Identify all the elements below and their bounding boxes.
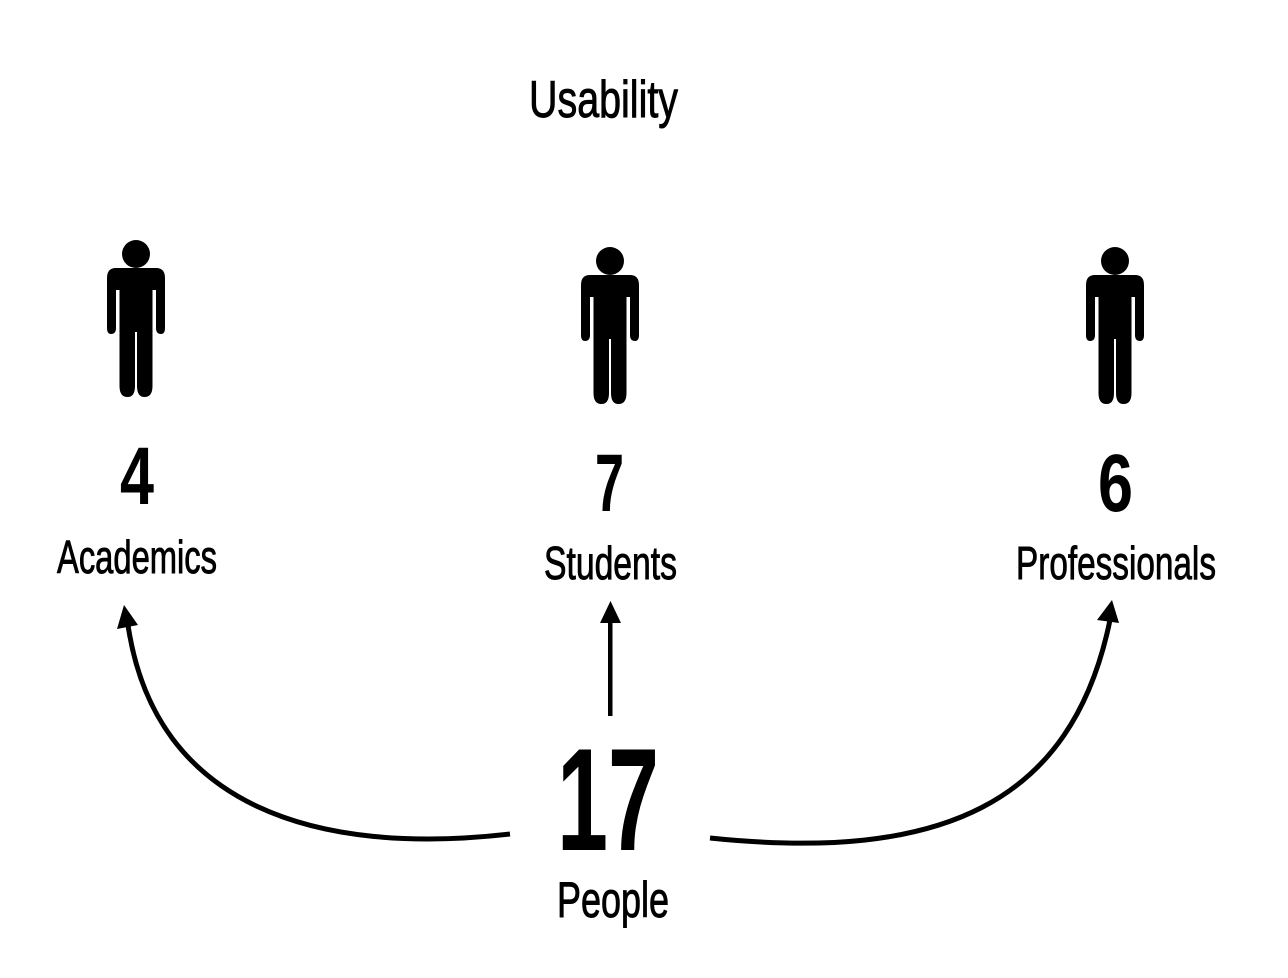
label: academics: Academics (57, 531, 217, 583)
number: students count: 7 (595, 438, 624, 529)
number: total people: 17 (557, 718, 659, 881)
label: students: Students (544, 537, 677, 589)
title: Usability (529, 71, 678, 129)
arrow: people to academics (117, 605, 510, 839)
group: students (544, 247, 677, 589)
label: people: People (557, 872, 669, 928)
icon: person students (581, 247, 639, 404)
arrow: people to professionals (710, 600, 1119, 843)
group: academics (57, 240, 217, 583)
group: professionals (1016, 247, 1216, 589)
icon: person academics (107, 240, 165, 397)
icon: person professionals (1086, 247, 1144, 404)
number: professionals count: 6 (1098, 438, 1133, 529)
number: academics count: 4 (120, 431, 154, 522)
arrow: people to students (600, 601, 621, 716)
label: professionals: Professionals (1016, 537, 1216, 589)
